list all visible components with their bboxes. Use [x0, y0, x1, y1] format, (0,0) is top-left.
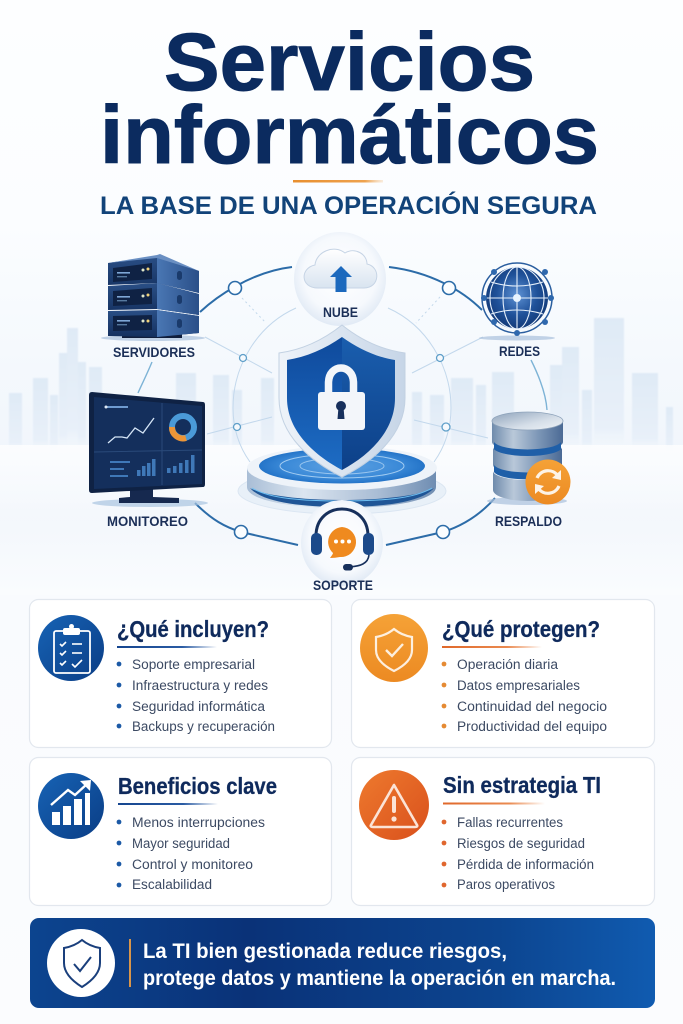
list: Escalabilidad — [132, 877, 212, 892]
label: soporte: SOPORTE — [313, 577, 373, 593]
icon: warning triangle — [359, 770, 429, 840]
heading: Sin estrategia TI — [443, 772, 601, 798]
icon: growth chart — [38, 773, 104, 839]
banner: key message — [30, 918, 655, 1008]
banner text — [143, 940, 616, 990]
list: Backups y recuperación — [132, 719, 275, 734]
icon: shield check — [47, 929, 115, 997]
icon: monitor dashboard — [89, 392, 208, 507]
title: informáticos — [100, 90, 599, 181]
panel: qué protegen — [352, 600, 654, 748]
list: Menos interrupciones — [132, 815, 265, 830]
panel: sin estrategia TI — [352, 758, 654, 906]
padlock — [318, 368, 365, 430]
floor glow — [0, 445, 683, 595]
list: Datos empresariales — [457, 678, 580, 693]
list: Soporte empresarial — [132, 657, 255, 672]
list: Riesgos de seguridad — [457, 836, 585, 851]
label: nube: NUBE — [323, 304, 358, 320]
label: servidores: SERVIDORES — [113, 344, 195, 360]
central platform — [238, 446, 446, 514]
list — [442, 657, 607, 734]
list: Paros operativos — [457, 877, 555, 892]
list: Pérdida de información — [457, 857, 594, 872]
list: Productividad del equipo — [457, 719, 607, 734]
subtitle: LA BASE DE UNA OPERACIÓN SEGURA — [100, 190, 597, 220]
banner text: La TI bien gestionada reduce riesgos, — [143, 940, 507, 963]
heading: ¿Qué incluyen? — [117, 616, 269, 642]
title: Servicios — [164, 17, 535, 108]
title — [100, 17, 599, 181]
heading: ¿Qué protegen? — [442, 616, 600, 642]
city skyline background — [9, 318, 673, 455]
label: monitoreo: MONITOREO — [107, 513, 188, 529]
connection arcs with nodes — [138, 267, 547, 545]
list — [117, 815, 265, 892]
banner text: protege datos y mantiene la operación en marcha. — [143, 967, 616, 990]
icon: support headset bubble — [301, 500, 383, 586]
label: respaldo: RESPALDO — [495, 513, 562, 529]
list — [442, 815, 594, 892]
panel: qué incluyen — [30, 600, 332, 748]
icon: shield check orange — [360, 614, 428, 682]
panel: beneficios clave — [30, 758, 332, 906]
label: redes: REDES — [499, 343, 540, 359]
accent line — [293, 180, 383, 182]
icon: globe network — [479, 263, 555, 340]
middle unit — [108, 283, 199, 315]
list: Continuidad del negocio — [457, 699, 607, 714]
inner thin ring — [205, 297, 488, 462]
list: Operación diaria — [457, 657, 558, 672]
icon: cloud bubble — [294, 232, 386, 326]
list: Mayor seguridad — [132, 836, 230, 851]
list: Control y monitoreo — [132, 857, 253, 872]
list — [117, 657, 275, 734]
icon: clipboard checklist — [38, 615, 104, 681]
bottom unit — [108, 310, 199, 337]
shield with lock — [279, 325, 405, 477]
icon: servers — [101, 254, 205, 341]
list: Fallas recurrentes — [457, 815, 563, 830]
icon: database backup — [487, 412, 570, 505]
list: Infraestructura y redes — [132, 678, 268, 693]
divider — [129, 939, 131, 987]
illustration: IT services hub — [0, 232, 683, 595]
list: Seguridad informática — [132, 699, 265, 714]
top unit — [108, 256, 199, 293]
heading: Beneficios clave — [118, 773, 277, 799]
